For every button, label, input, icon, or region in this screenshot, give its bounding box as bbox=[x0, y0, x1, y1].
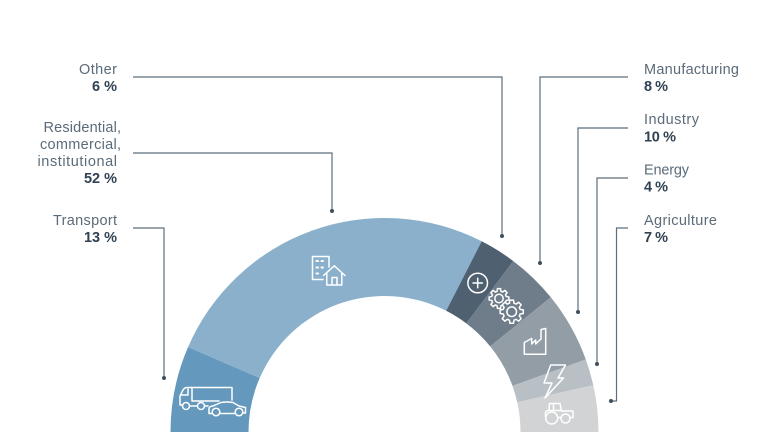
label: residential, commercial, institutional: institutional bbox=[38, 154, 117, 170]
label: industry bbox=[644, 112, 700, 146]
icon: gears bbox=[489, 289, 523, 323]
label: residential, commercial, institutional: commercial, bbox=[40, 137, 121, 153]
icon: lightning bolt bbox=[544, 365, 566, 398]
segment: transport 13 % bbox=[170, 347, 260, 432]
label: agriculture bbox=[644, 213, 717, 246]
label: manufacturing: Manufacturing bbox=[644, 62, 739, 78]
label: manufacturing: 8 % bbox=[644, 79, 668, 95]
icon: tractor bbox=[546, 404, 573, 424]
leader: residential bbox=[133, 153, 334, 213]
icon: plus in circle bbox=[468, 273, 488, 293]
leader: energy bbox=[595, 178, 628, 366]
label: industry: 10 % bbox=[644, 130, 676, 146]
label: agriculture: Agriculture bbox=[644, 213, 717, 229]
segment: industry 10 % bbox=[490, 297, 586, 386]
semicircular donut chart bbox=[170, 218, 598, 432]
segment: agriculture 7 % bbox=[517, 385, 598, 432]
label: other: Other bbox=[79, 62, 117, 78]
label: manufacturing bbox=[644, 62, 739, 95]
label: industry: Industry bbox=[644, 112, 700, 128]
label: residential, commercial, institutional: 52 % bbox=[84, 171, 117, 187]
label: energy: 4 % bbox=[644, 180, 668, 196]
label: transport: 13 % bbox=[84, 230, 117, 246]
small gear bbox=[489, 289, 509, 308]
segment: energy 4 % bbox=[512, 360, 593, 402]
leader: industry bbox=[576, 128, 628, 314]
label: energy: Energy bbox=[644, 162, 690, 178]
label: agriculture: 7 % bbox=[644, 230, 668, 246]
segment: residential, commercial, institutional 52 % bbox=[188, 218, 482, 378]
leader: manufacturing bbox=[538, 77, 628, 265]
label: transport bbox=[53, 213, 117, 246]
label: energy bbox=[644, 162, 690, 196]
icon: truck and car bbox=[180, 388, 246, 416]
label: other bbox=[79, 62, 117, 95]
leader: transport bbox=[133, 228, 166, 380]
large gear bbox=[500, 300, 523, 323]
label: residential, commercial, institutional bbox=[38, 120, 121, 187]
segment: other 6 % bbox=[446, 241, 513, 323]
segment: manufacturing 8 % bbox=[466, 261, 551, 346]
label: other: 6 % bbox=[92, 79, 117, 95]
leader: agriculture bbox=[609, 228, 628, 403]
label: residential, commercial, institutional: Residential, bbox=[44, 120, 121, 136]
label: transport: Transport bbox=[53, 213, 117, 229]
leader: other bbox=[133, 77, 504, 238]
icon: factory bbox=[524, 328, 546, 354]
icon: building and house bbox=[312, 256, 345, 285]
